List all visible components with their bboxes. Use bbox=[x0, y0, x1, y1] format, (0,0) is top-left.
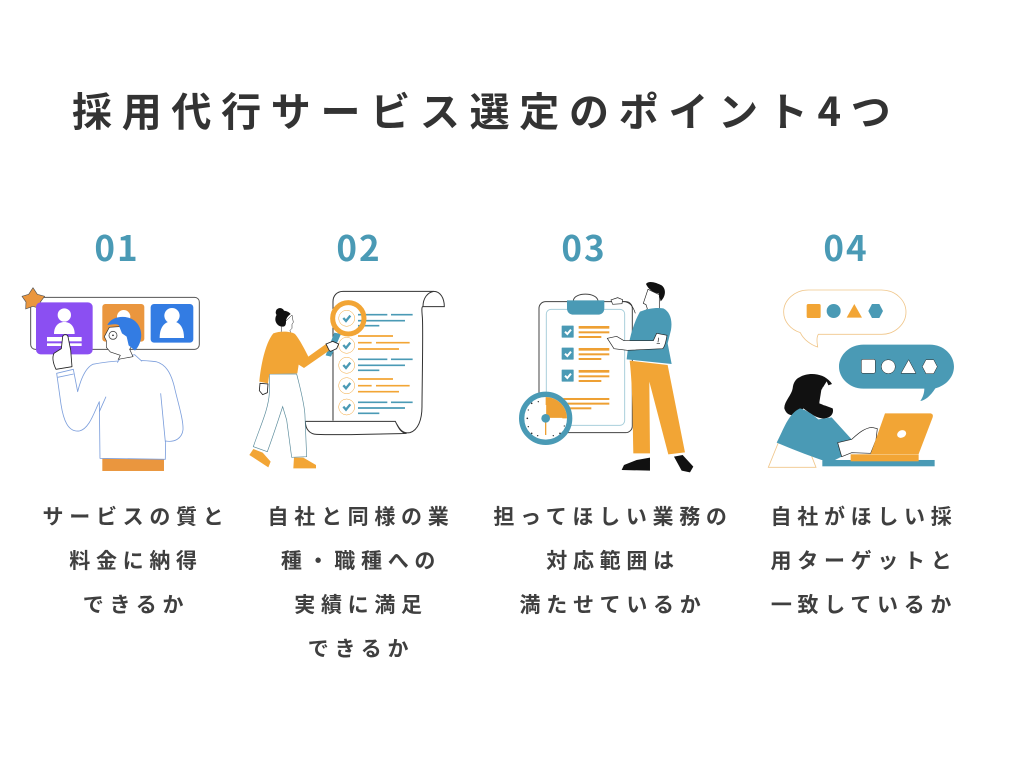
figure: man bbox=[607, 282, 693, 472]
clipboard bbox=[539, 294, 632, 433]
speech bubble: filled bbox=[839, 345, 954, 401]
number 04: 04 bbox=[823, 221, 869, 272]
text: point 2: 自社と同様の業 bbox=[268, 501, 454, 531]
document scroll bbox=[305, 291, 444, 435]
card: orange profile bbox=[102, 304, 144, 342]
check marks bbox=[339, 310, 355, 415]
icon: star bbox=[22, 288, 45, 309]
text: point 1: 料金に納得 bbox=[69, 545, 203, 575]
checklist bbox=[562, 326, 609, 409]
text: point 1: サービスの質と bbox=[43, 501, 229, 531]
text: point 2: 実績に満足 bbox=[294, 589, 428, 619]
text: point 4: 一致しているか bbox=[771, 589, 957, 619]
text: point 1 bbox=[43, 501, 229, 619]
text: point 2: できるか bbox=[308, 633, 414, 663]
figure: woman bbox=[249, 308, 339, 468]
text: point 3: 対応範囲は bbox=[546, 545, 680, 575]
laptop and desk bbox=[822, 413, 935, 466]
text: point 2: 種・職種への bbox=[281, 545, 441, 575]
title: 採用代行サービス選定のポイント4つ bbox=[72, 80, 900, 138]
checklist rows bbox=[358, 315, 413, 413]
illustration 4: woman at laptop with speech bubbles bbox=[768, 290, 954, 467]
text: point 3 bbox=[493, 501, 733, 619]
card: blue profile bbox=[151, 304, 193, 343]
number 03: 03 bbox=[561, 221, 607, 272]
text: point 4: 自社がほしい採 bbox=[771, 501, 957, 531]
number 01: 01 bbox=[94, 221, 140, 272]
card: purple profile bbox=[36, 302, 93, 354]
text: point 3: 満たせているか bbox=[520, 589, 706, 619]
text: point 4: 用ターゲットと bbox=[771, 545, 957, 575]
illustration 2: woman inspecting a checklist bbox=[249, 291, 444, 468]
illustration 3: man with clipboard and clock bbox=[522, 282, 693, 472]
number 02: 02 bbox=[336, 221, 382, 272]
icon: clock bbox=[522, 394, 570, 442]
text: point 4 bbox=[771, 501, 957, 619]
illustration 1: person selecting a profile bbox=[22, 288, 199, 471]
figure: woman bbox=[768, 374, 877, 467]
figure: man from behind bbox=[53, 317, 183, 471]
text: point 1: できるか bbox=[83, 589, 189, 619]
icon: magnifier bbox=[326, 303, 364, 357]
text: point 2 bbox=[268, 501, 454, 663]
speech bubble: outlined bbox=[784, 290, 906, 347]
text: point 3: 担ってほしい業務の bbox=[493, 501, 733, 531]
